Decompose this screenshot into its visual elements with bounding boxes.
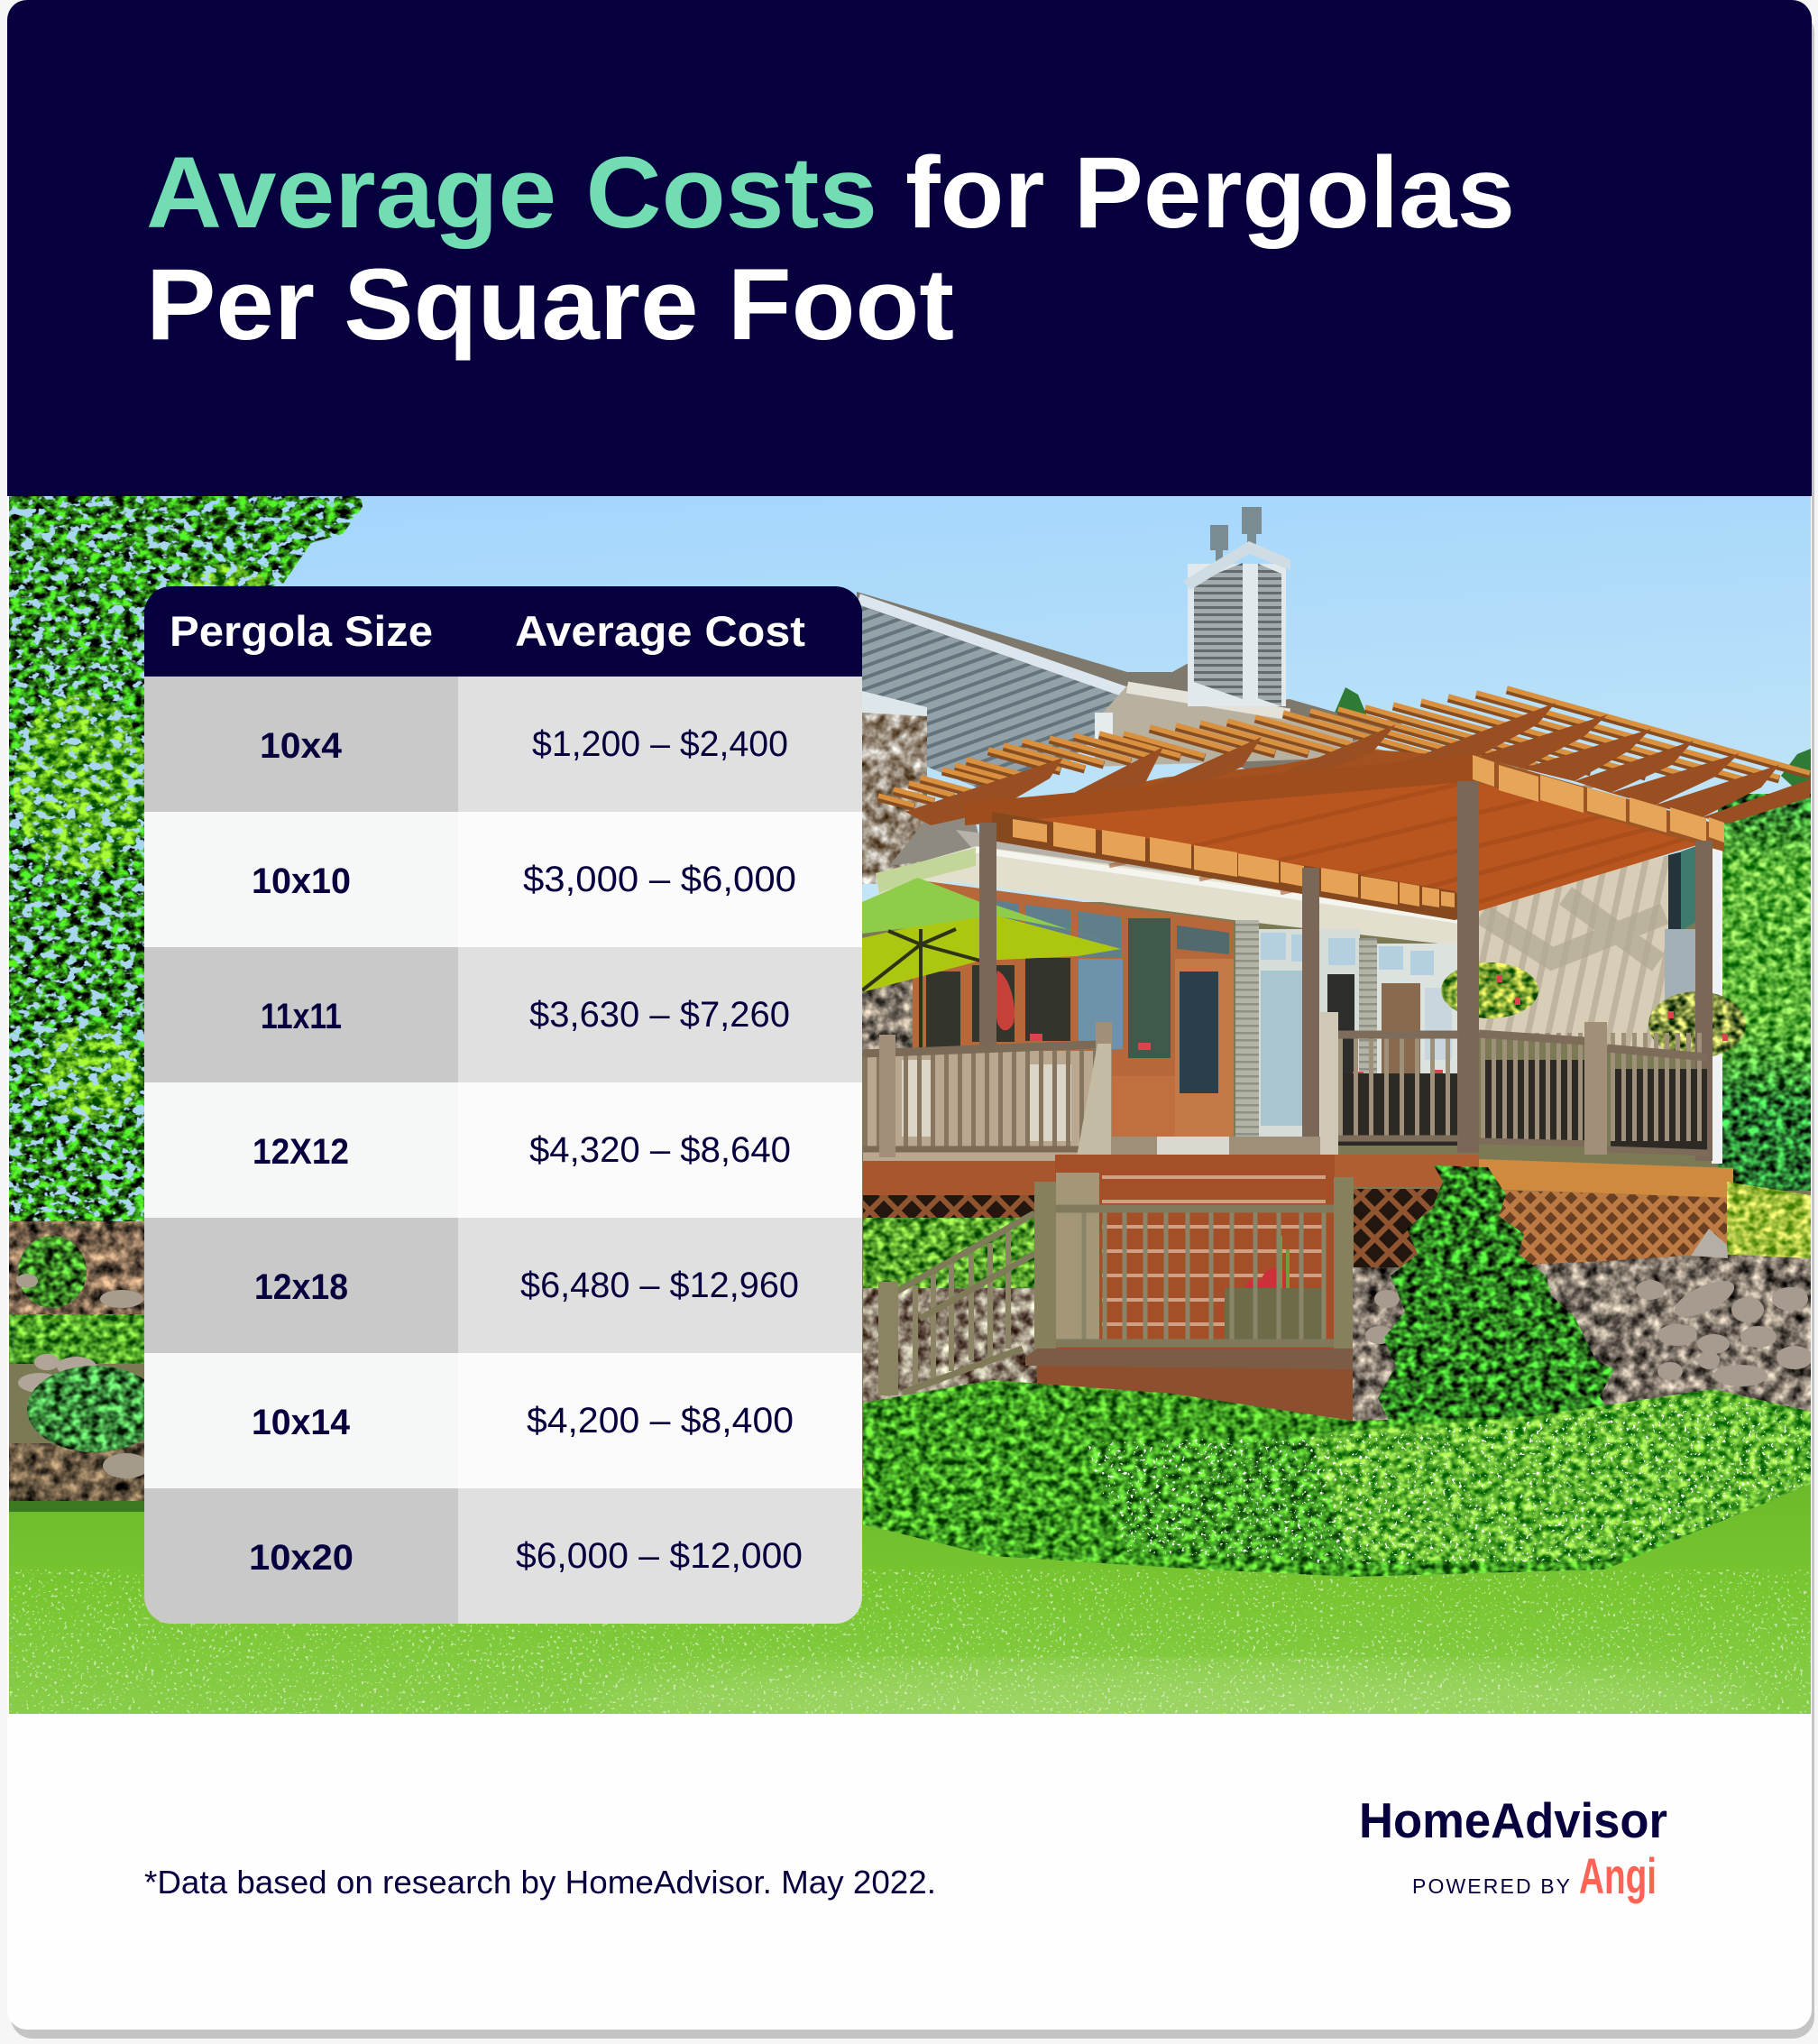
left background	[863, 1051, 1112, 1161]
slats: pergola top dark	[878, 690, 1810, 807]
beige wall with shadows	[1479, 855, 1669, 1054]
hanging flowers	[995, 962, 1746, 1075]
shrubs by deck right	[1727, 1182, 1811, 1263]
hanging basket two	[1648, 991, 1746, 1058]
rock pile left	[863, 1288, 1043, 1405]
gate right post	[1334, 1177, 1354, 1360]
title: for Pergolas	[905, 136, 1515, 249]
gate left post	[1034, 1182, 1056, 1357]
chimney louvers left	[1194, 563, 1243, 699]
stone behind umbrella	[862, 979, 913, 1055]
upper window shutter	[1668, 846, 1696, 931]
pergola shadow	[1482, 896, 1665, 962]
lattice centre	[1353, 1189, 1465, 1270]
table header	[144, 586, 862, 677]
lower roof shingles	[956, 830, 1201, 877]
threshold	[1112, 1137, 1337, 1162]
row 10x10: $3,000 – $6,000	[523, 860, 796, 899]
left ground strip	[9, 1221, 162, 1512]
front beam	[965, 755, 1474, 825]
dark lower panes	[926, 958, 1070, 1048]
logo	[1359, 1792, 1667, 1904]
row 12X12	[144, 1082, 862, 1218]
slats: pergola top light	[878, 688, 1810, 806]
greenish soffit reflection	[876, 848, 976, 893]
flowering bushes band	[863, 1380, 1811, 1577]
title second line: Per Square Foot	[146, 248, 954, 361]
right dark furniture	[1338, 1060, 1707, 1150]
left light beam ends	[1013, 819, 1455, 907]
gate rails	[1055, 1209, 1335, 1343]
header: pergola size: Pergola Size	[170, 607, 433, 655]
side stair rail	[878, 1213, 1034, 1395]
dark door	[1327, 974, 1354, 1073]
row 11x11: $3,630 – $7,260	[529, 995, 790, 1035]
blue pane	[1079, 959, 1123, 1049]
planter box	[1225, 1288, 1323, 1340]
left balusters	[863, 1049, 1096, 1148]
rocks above hosta	[18, 1354, 96, 1393]
rocks band	[863, 1218, 1043, 1405]
row 10x4: 10x4	[260, 726, 343, 766]
door	[1175, 959, 1234, 1137]
downspout	[1095, 713, 1113, 740]
umbrella	[862, 878, 1121, 1048]
lower soffit	[876, 846, 1470, 947]
lawn shadow	[9, 1501, 144, 1512]
row 12x18	[144, 1218, 862, 1353]
lower orange wall	[1112, 1076, 1175, 1137]
lattice left	[863, 1195, 1034, 1263]
treads	[1055, 1155, 1335, 1349]
flower dots	[1030, 979, 1728, 1075]
balusters	[915, 1231, 1008, 1389]
siding under window	[1665, 929, 1699, 999]
hosta bush	[27, 1366, 162, 1452]
mat	[1157, 1137, 1229, 1156]
gable fascia trim	[858, 599, 1125, 692]
deck fascia left	[863, 1161, 1069, 1195]
plant on mulch	[18, 1236, 87, 1308]
tall pane	[1261, 971, 1302, 1126]
right bottom rails	[1338, 1138, 1707, 1153]
chimney body	[1188, 564, 1286, 706]
row 12X12: 12X12	[252, 1132, 349, 1172]
ribs and pole	[862, 929, 980, 1048]
stair stringer	[1056, 1173, 1099, 1344]
row 10x4	[144, 677, 862, 812]
landing top	[1025, 1349, 1365, 1369]
gate balusters	[1084, 1211, 1324, 1340]
gate	[1034, 1177, 1354, 1360]
right windows	[1259, 929, 1360, 1138]
underside rafter shading	[1109, 767, 1713, 902]
boulders	[1365, 1274, 1813, 1386]
pale centre post	[1320, 1012, 1338, 1164]
upper panes	[995, 900, 1121, 958]
row 12X12: $4,320 – $8,640	[529, 1130, 791, 1170]
right balusters two	[1481, 1033, 1707, 1141]
small rocks	[16, 1274, 143, 1308]
row 10x20	[144, 1488, 862, 1624]
red flowers vine	[995, 971, 1015, 1030]
row 10x14	[144, 1353, 862, 1488]
chimney	[1183, 507, 1290, 706]
pergola underside	[967, 757, 1724, 913]
rails	[896, 1213, 1034, 1393]
door screen	[1180, 971, 1218, 1093]
row 10x20: 10x20	[249, 1538, 354, 1578]
wall	[1479, 855, 1669, 1054]
siding strip two	[1359, 938, 1377, 1138]
rafter beams	[905, 703, 1810, 825]
sky glimpses behind left tree	[9, 496, 189, 1227]
column cap	[862, 691, 927, 716]
stone column	[862, 713, 927, 884]
main stairs	[1055, 1155, 1335, 1349]
chimney louvers right	[1258, 564, 1281, 706]
right balusters one	[1338, 1036, 1457, 1137]
white blossoms	[1082, 1394, 1811, 1565]
row 10x14: 10x14	[252, 1403, 351, 1442]
deck fascia centre	[1326, 1155, 1479, 1187]
frame	[1259, 929, 1360, 1138]
powered by: POWERED BY	[1412, 1874, 1570, 1898]
sky	[189, 496, 1811, 902]
row 12x18: $6,480 – $12,960	[520, 1266, 799, 1305]
flowers	[1244, 1267, 1289, 1288]
HomeAdvisor wordmark: HomeAdvisor	[1359, 1792, 1667, 1848]
newel post	[878, 1282, 898, 1395]
left bottom rail	[863, 1146, 1096, 1153]
lower gutter	[976, 850, 1470, 922]
deck fascia right	[1479, 1159, 1733, 1198]
left tree lighter patches	[14, 564, 266, 1123]
wall siding strip	[1235, 920, 1259, 1138]
door panel	[1175, 959, 1234, 1137]
diagonal stair rail	[1073, 1044, 1111, 1192]
big shrub	[1378, 1165, 1621, 1458]
white chairs	[902, 1060, 1071, 1141]
interior	[1382, 983, 1420, 1073]
header band	[7, 0, 1812, 496]
right tree	[1718, 794, 1811, 1191]
left tree	[9, 496, 363, 1227]
right block band	[1473, 755, 1724, 852]
bright green strip	[9, 1314, 144, 1364]
scene underlay	[9, 902, 1811, 1479]
row 11x11	[144, 947, 862, 1082]
row 10x4: $1,200 – $2,400	[532, 724, 788, 764]
row 10x10: 10x10	[252, 861, 351, 901]
landing side	[1037, 1366, 1365, 1434]
white trim	[1712, 839, 1722, 1164]
transom	[1177, 925, 1229, 954]
chimney cap	[1183, 541, 1290, 590]
title: Average Costs	[146, 136, 877, 249]
sunroom windows	[926, 900, 1229, 1058]
lighter right bushes	[1308, 1389, 1811, 1561]
rafter backing	[1055, 749, 1479, 801]
upper roof shingles	[857, 592, 1407, 776]
green lawn	[9, 1443, 1811, 1714]
glass	[1425, 988, 1452, 1060]
cost table	[144, 586, 862, 1624]
lattice right	[1465, 1189, 1733, 1272]
Angi wordmark: Angi	[1579, 1847, 1657, 1904]
frame	[1377, 944, 1458, 1138]
window	[1668, 852, 1683, 931]
green behind rocks left	[863, 1218, 1034, 1290]
header: average cost: Average Cost	[515, 607, 805, 655]
chimney vents	[1210, 507, 1262, 561]
gutter	[1127, 687, 1290, 714]
roof valley	[889, 816, 983, 866]
distant tree tips	[1335, 687, 1811, 803]
pale patches on lawn	[586, 1664, 1758, 1736]
row 10x20: $6,000 – $12,000	[516, 1536, 803, 1576]
photo: house with pergola	[9, 496, 1813, 1736]
hanging basket one	[1441, 962, 1538, 1018]
deck railings	[863, 1012, 1707, 1164]
rail posts	[879, 1022, 1607, 1157]
sunroom frame	[913, 879, 1234, 1138]
upper panes	[1261, 933, 1355, 965]
row 11x11: 11x11	[261, 997, 342, 1036]
row 10x10	[144, 812, 862, 947]
canopy top	[862, 878, 1121, 947]
source footnote: *Data based on research by HomeAdvisor. May 2022.	[144, 1864, 936, 1901]
tall pane	[1128, 918, 1171, 1058]
mulch lower	[9, 1443, 144, 1503]
right light beam ends	[1473, 755, 1724, 842]
upper panes	[1379, 946, 1434, 975]
row 10x14: $4,200 – $8,400	[527, 1401, 794, 1441]
left top rail	[863, 1045, 1096, 1054]
right top rails	[1335, 1034, 1707, 1057]
far windows	[1377, 944, 1458, 1138]
planter	[1225, 1236, 1323, 1340]
large rock	[103, 1453, 150, 1478]
blossoms on lawn	[9, 1570, 1811, 1714]
shutter	[1681, 846, 1696, 931]
pergola posts	[979, 781, 1712, 1161]
soffit behind pergola	[1095, 686, 1353, 767]
row 12x18: 12x18	[254, 1267, 348, 1307]
green stems	[1281, 1236, 1288, 1290]
gravel	[1353, 1254, 1811, 1434]
left block band	[992, 812, 1479, 920]
pale boulder	[1691, 1229, 1728, 1258]
rocks right	[1353, 1229, 1813, 1434]
landing	[1025, 1349, 1365, 1434]
canopy underside	[862, 911, 1121, 992]
upper gable siding	[861, 606, 1130, 794]
mulch upper	[9, 1221, 144, 1316]
tread lines	[1102, 1177, 1326, 1324]
